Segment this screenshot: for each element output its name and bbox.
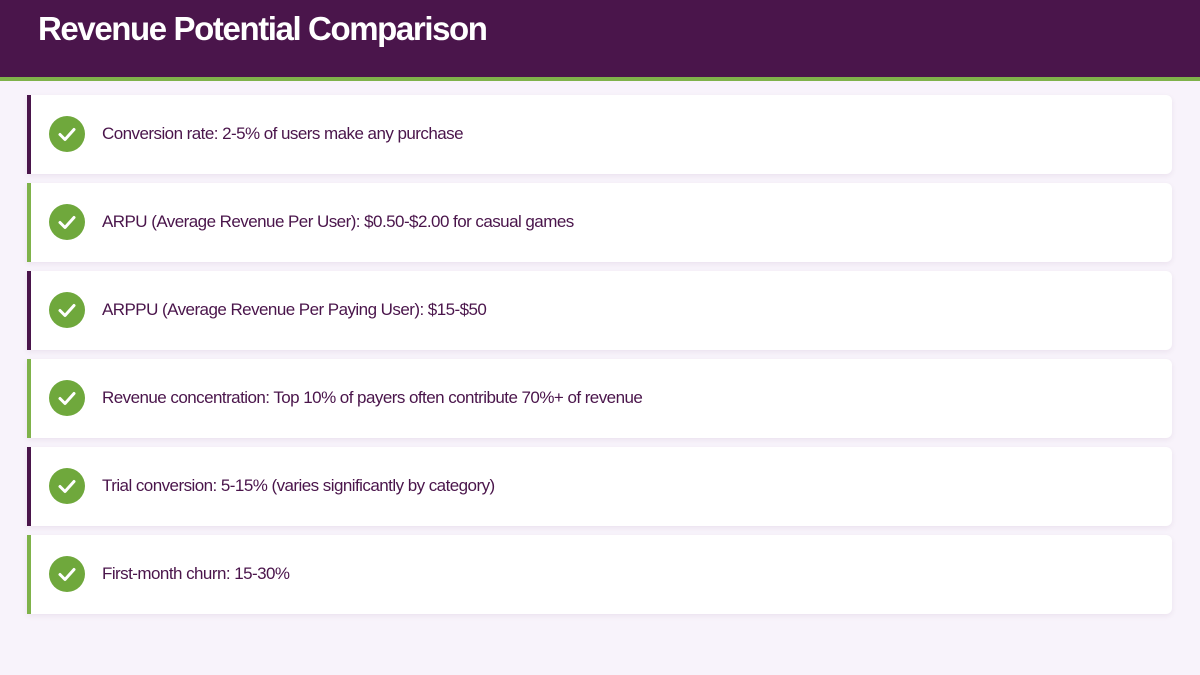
header	[0, 0, 1200, 81]
card: churn	[27, 535, 1172, 614]
icon: check	[49, 292, 85, 328]
card: ARPU	[27, 183, 1172, 262]
text: Trial conversion: 5-15% (varies significantly by category)	[102, 476, 495, 495]
card: conversion rate	[27, 95, 1172, 174]
text: ARPPU (Average Revenue Per Paying User): $15-$50	[102, 300, 486, 319]
text: First-month churn: 15-30%	[102, 564, 290, 583]
card: revenue concentration	[27, 359, 1172, 438]
title: Revenue Potential Comparison	[38, 10, 487, 47]
text: Conversion rate: 2-5% of users make any purchase	[102, 124, 463, 143]
icon: check	[49, 468, 85, 504]
card: trial conversion	[27, 447, 1172, 526]
icon: check	[49, 204, 85, 240]
icon: check	[49, 380, 85, 416]
card: ARPPU	[27, 271, 1172, 350]
icon: check	[49, 556, 85, 592]
text: Revenue concentration: Top 10% of payers often contribute 70%+ of revenue	[102, 388, 642, 407]
icon: check	[49, 116, 85, 152]
text: ARPU (Average Revenue Per User): $0.50-$2.00 for casual games	[102, 212, 574, 231]
